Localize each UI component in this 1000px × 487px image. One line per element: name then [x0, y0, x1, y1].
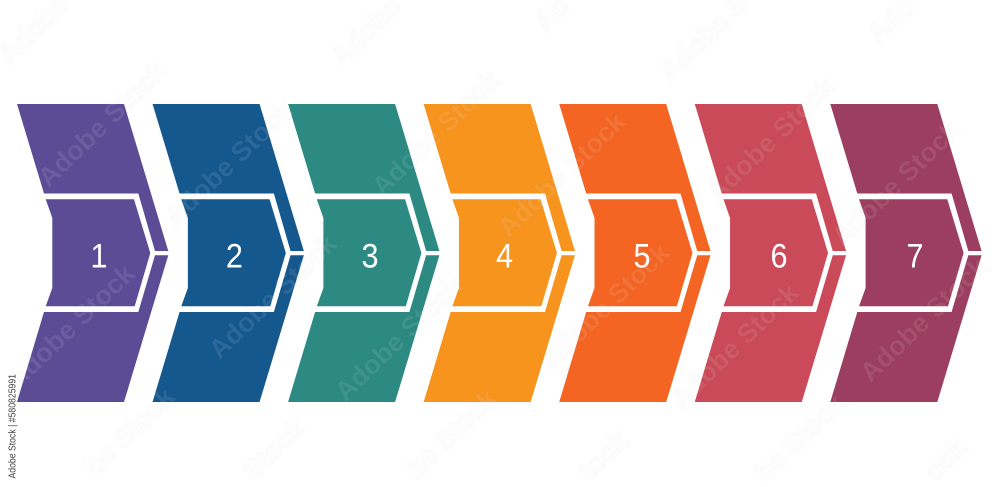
watermark: Adobe Stock — [159, 95, 299, 232]
watermark: be Stock — [79, 381, 181, 481]
chevron 2 — [153, 104, 304, 402]
chevron 7 — [830, 104, 982, 402]
chevron 3 — [288, 104, 439, 402]
chevron 5: 5 — [633, 237, 651, 275]
chevron 2: 2 — [226, 237, 243, 275]
chevron 4 — [424, 104, 575, 402]
side credit: Adobe Stock | #580825991 — [8, 374, 18, 478]
watermark: Adobe Stock — [665, 277, 805, 414]
chevron 4: 4 — [496, 237, 513, 275]
watermark: Adobe Stock — [329, 270, 469, 407]
watermark: be Stock — [401, 383, 503, 483]
chevron 5 — [559, 104, 710, 402]
watermark: Adobe Stock — [536, 237, 676, 374]
watermark: tock — [573, 425, 635, 486]
watermark: Adobe Stock — [854, 251, 994, 388]
watermark: Adobe Stock — [366, 65, 506, 202]
chevron 1: 1 — [90, 237, 108, 275]
watermark: Adobe Stock — [492, 106, 632, 243]
watermark: Adobe Stock — [203, 228, 343, 365]
watermark: Adobe Stock — [826, 115, 966, 252]
watermark: Adobe Stock — [32, 56, 172, 193]
chevron 7: 7 — [906, 237, 924, 275]
chevron 6: 6 — [770, 237, 788, 275]
watermark: Adobe Stock — [701, 71, 841, 208]
watermark: ock — [919, 432, 974, 486]
watermark: Stock — [237, 413, 311, 486]
watermark: be Stock — [749, 387, 851, 487]
chevron 1 — [17, 104, 168, 402]
chevron 3: 3 — [361, 237, 379, 275]
watermark: Adobe Stock — [1, 258, 141, 395]
chevron 6 — [695, 104, 846, 402]
